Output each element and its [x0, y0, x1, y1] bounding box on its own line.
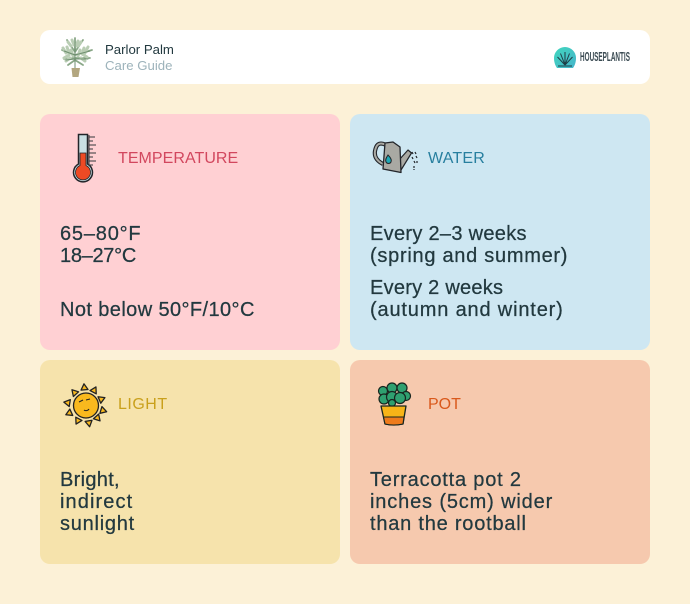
pot description text [370, 469, 553, 535]
autumn and winter watering text: (autumn and winter) [370, 299, 564, 321]
light description text: sunlight [60, 513, 135, 535]
autumn and winter watering text [370, 277, 564, 321]
panel: water [350, 114, 650, 350]
temperature range text: 18–27°C [60, 245, 136, 267]
autumn and winter watering text: Every 2 weeks [370, 277, 503, 299]
spring and summer watering text: (spring and summer) [370, 245, 568, 267]
temperature range text: 65–80°F [60, 223, 141, 245]
heading: temperature: TEMPERATURE [118, 150, 238, 167]
temperature range text [60, 223, 141, 267]
pot description text: than the rootball [370, 513, 527, 535]
pot description text: Terracotta pot 2 [370, 469, 522, 491]
panel: light [40, 360, 340, 564]
heading: pot: POT [428, 396, 461, 413]
header title [105, 42, 174, 72]
pot description text: inches (5cm) wider [370, 491, 553, 513]
panel: temperature [40, 114, 340, 350]
light description text: indirect [60, 491, 133, 513]
heading: light: LIGHT [118, 396, 168, 413]
header bar [40, 30, 650, 84]
header title: Parlor Palm [105, 42, 174, 56]
heading: water: WATER [428, 150, 485, 167]
light description text [60, 469, 135, 535]
logo wordmark: HOUSEPLANTIS [580, 50, 630, 64]
header title: Care Guide [105, 58, 172, 72]
spring and summer watering text: Every 2–3 weeks [370, 223, 527, 245]
temperature minimum text: Not below 50°F/10°C [60, 299, 255, 321]
light description text: Bright, [60, 469, 120, 491]
panel: pot [350, 360, 650, 564]
spring and summer watering text [370, 223, 568, 267]
